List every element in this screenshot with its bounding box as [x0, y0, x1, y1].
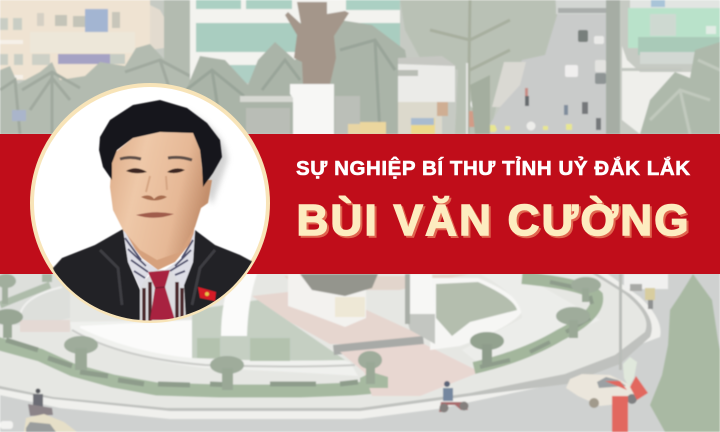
- balloons: [623, 357, 637, 387]
- banner subtitle: SỰ NGHIỆP BÍ THƯ TỈNH UỶ ĐẮK LẮK: [296, 156, 690, 180]
- beige car: [566, 374, 637, 408]
- right hedge ring: [474, 278, 597, 368]
- motorbike rider, centre: [439, 381, 468, 412]
- plaza pavement: [0, 272, 646, 408]
- strip of trees and poles beside street: [606, 0, 620, 134]
- portrait photo: [53, 100, 253, 322]
- right palm tree: [640, 42, 720, 134]
- palms on the plaza: [0, 274, 601, 390]
- striped collars: [123, 228, 195, 288]
- central building with teal windows: [190, 0, 400, 83]
- inner basin and curved wall: [70, 320, 358, 376]
- mouth: [136, 212, 174, 218]
- red flags: [605, 376, 648, 432]
- right reflecting pool: [430, 278, 522, 350]
- monument pedestal: [290, 84, 334, 136]
- white roadside building: [360, 56, 456, 134]
- left palm trees: [0, 44, 250, 134]
- basin green water: [192, 300, 345, 361]
- nose bridge shading: [146, 176, 167, 192]
- face: [110, 132, 212, 260]
- pink stone slab: [252, 292, 423, 344]
- tank memorial on plinth: [288, 274, 378, 327]
- eyebrows: [120, 157, 192, 160]
- inner upper-left lawn and drive: [0, 272, 70, 325]
- suit jacket: [53, 229, 253, 322]
- big roadside tree: [400, 0, 560, 134]
- white arches: [221, 274, 435, 344]
- neck: [126, 228, 195, 270]
- right edge tree: [650, 274, 720, 432]
- dark trees between buildings: [164, 0, 192, 72]
- hair: [99, 100, 222, 187]
- name text: BÙI VĂN CƯỜNG: [296, 195, 688, 245]
- kerb band: [0, 272, 652, 411]
- pink forecourt: [340, 344, 480, 396]
- nose shadow: [141, 195, 167, 200]
- right pavement crescent: [462, 274, 600, 366]
- street with traffic: [466, 0, 616, 134]
- red tie: [148, 270, 175, 320]
- left hedge ring: [0, 343, 388, 391]
- motorbike rider, left: [28, 388, 53, 416]
- white road marker: [0, 421, 13, 429]
- white car, lower left: [24, 414, 77, 432]
- left peach building: [0, 0, 168, 80]
- medallion ring: [32, 85, 268, 321]
- eyes: [126, 168, 185, 173]
- left palm fronds: [0, 60, 190, 134]
- name heading: [296, 195, 690, 247]
- slab steps: [333, 336, 424, 355]
- background photo: city street and monument, top: [0, 0, 720, 136]
- name drop shadow: BÙI VĂN CƯỜNG: [298, 197, 690, 247]
- lapel highlights: [100, 250, 215, 305]
- lamp pole: [619, 274, 622, 370]
- road surface: [0, 270, 720, 432]
- centre palm trees: [186, 20, 412, 134]
- outer white kerb line: [0, 272, 661, 419]
- striped shirt front: [140, 270, 186, 322]
- white basin surface: [80, 320, 192, 358]
- monument statue: [285, 2, 349, 84]
- right white curved building: [622, 46, 720, 134]
- white truck and rider: [624, 274, 668, 309]
- portrait medallion: [32, 85, 268, 322]
- right green building: [628, 0, 720, 64]
- red banner: [0, 134, 720, 274]
- red lapel pin flag: [198, 287, 216, 301]
- background photo: roundabout plaza, bottom: [0, 270, 720, 432]
